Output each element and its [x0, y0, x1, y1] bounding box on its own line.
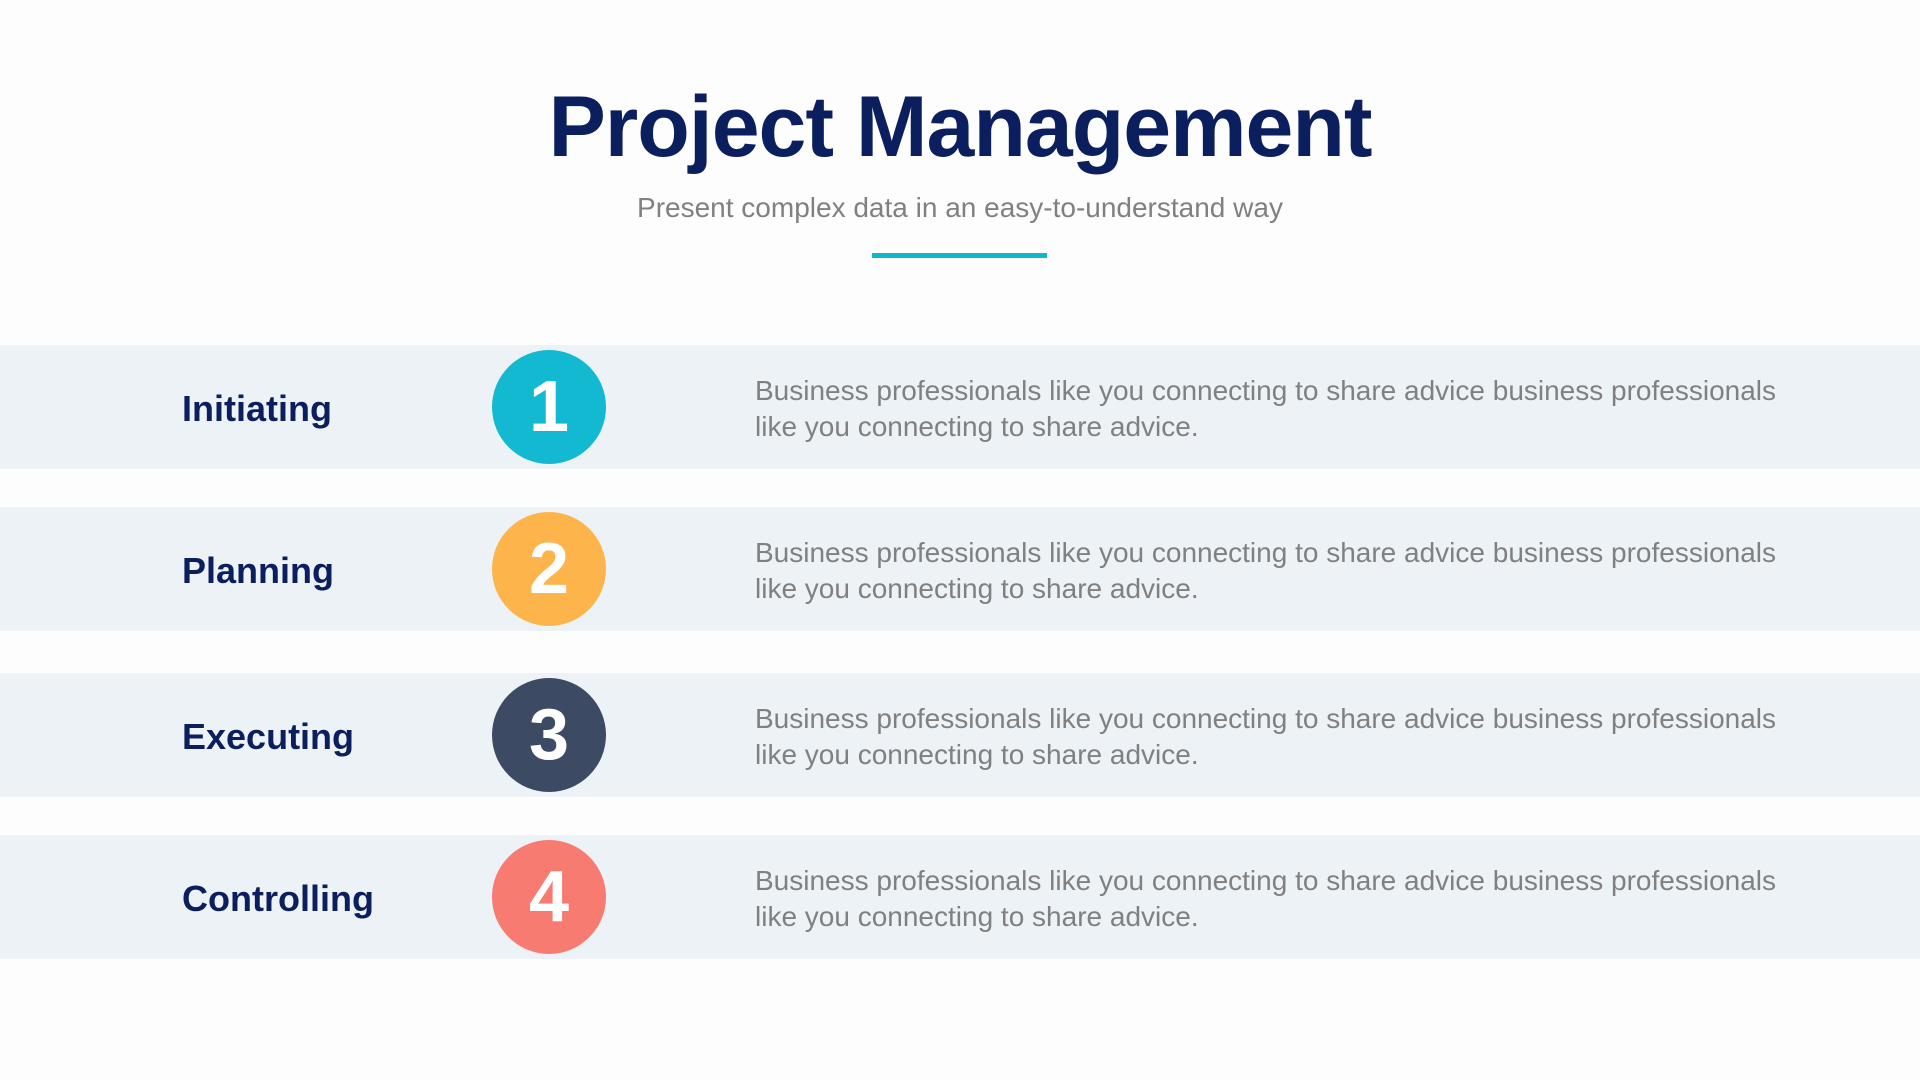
number circle 3: 3 [529, 695, 569, 775]
row 3: Executing [0, 673, 1920, 797]
number circle 1: 1 [529, 367, 569, 447]
number circle 2 [492, 512, 606, 626]
subtitle: Present complex data in an easy-to-understand way [637, 192, 1283, 223]
number circle 1 [492, 350, 606, 464]
row 1: Initiating [0, 345, 1920, 469]
label: Executing [182, 716, 354, 757]
label: Controlling [182, 878, 374, 919]
label: Initiating [182, 388, 332, 429]
number circle 3 [492, 678, 606, 792]
label: Planning [182, 550, 334, 591]
row 2: Planning [0, 507, 1920, 631]
description: Business professionals like you connecting to share advice business professionals like you connecting to share advice. [755, 375, 1776, 442]
description: Business professionals like you connecting to share advice business professionals like you connecting to share advice. [755, 537, 1776, 604]
description: Business professionals like you connecting to share advice business professionals like you connecting to share advice. [755, 865, 1776, 932]
number circle 2: 2 [529, 529, 569, 609]
row 4: Controlling [0, 835, 1920, 959]
accent underline [872, 253, 1047, 258]
number circle 4: 4 [529, 857, 569, 937]
number circle 4 [492, 840, 606, 954]
description: Business professionals like you connecting to share advice business professionals like you connecting to share advice. [755, 703, 1776, 770]
title: Project Management [548, 79, 1372, 175]
